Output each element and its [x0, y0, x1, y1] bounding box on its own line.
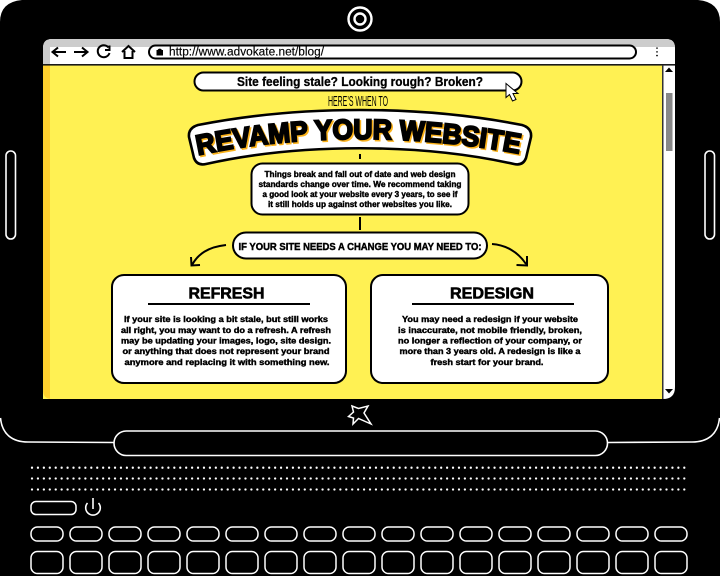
- keyboard: [31, 527, 687, 574]
- icon: home: [122, 46, 135, 58]
- white screen corners: [0, 0, 720, 22]
- scroll down arrow: [665, 389, 673, 394]
- icon: back arrow: [52, 48, 66, 56]
- laptop hinge with trackpad: [0, 418, 720, 456]
- icon: reload: [98, 45, 110, 57]
- scroll thumb: [666, 93, 672, 151]
- redesign rule: [412, 303, 574, 305]
- change banner: IF YOUR SITE NEEDS A CHANGE YOU MAY NEED TO:: [238, 241, 482, 253]
- panel: redesign: [371, 275, 608, 383]
- toolbar divider: [43, 64, 675, 66]
- intro text box: standards change over time. We recommend taking: [258, 180, 462, 189]
- title banner: [188, 108, 532, 166]
- panel: refresh: [112, 275, 346, 383]
- intro text box: it still holds up against other websites you like.: [268, 200, 452, 209]
- browser frame: [43, 39, 675, 399]
- scrollbar: [662, 65, 673, 399]
- intro text box: [252, 164, 468, 214]
- arrow: left: [191, 245, 226, 266]
- key row 1: [31, 527, 687, 541]
- icon: mouse cursor: [506, 84, 518, 101]
- icon: star logo: [348, 406, 371, 424]
- connector: [359, 154, 361, 159]
- connector: [359, 217, 361, 230]
- title text: REVAMP YOUR WEBSITE: [194, 118, 522, 156]
- refresh heading: REFRESH: [188, 286, 264, 302]
- key row 2: [31, 552, 687, 574]
- icon: forward arrow: [74, 48, 88, 56]
- browser top strip: [43, 39, 675, 65]
- refresh body: [121, 315, 331, 367]
- address bar: [149, 46, 636, 58]
- arrow: right: [492, 244, 527, 266]
- icon: menu dots: [656, 48, 658, 56]
- title banner shape: [189, 110, 531, 164]
- refresh body: or anything that does not represent your brand: [122, 347, 330, 356]
- change banner: [233, 232, 487, 258]
- icon: lock: [157, 49, 162, 55]
- refresh body: If your site is looking a bit stale, but still works: [124, 315, 328, 324]
- icon: webcam: [348, 8, 372, 30]
- redesign body: is inaccurate, not mobile friendly, broken,: [398, 326, 582, 335]
- title shadow: REVAMP YOUR WEBSITE: [200, 120, 524, 158]
- redesign body: [398, 315, 583, 367]
- text: HERE’S WHEN TO: [328, 93, 388, 110]
- spacebar key: [31, 502, 76, 514]
- refresh rule: [148, 303, 310, 305]
- speaker dots: [32, 468, 688, 490]
- redesign body: no longer a reflection of your company, or: [398, 336, 583, 346]
- redesign body: fresh start for your brand.: [430, 358, 544, 367]
- question banner: [194, 72, 522, 90]
- icon: power: [86, 498, 100, 515]
- scroll up arrow: [665, 68, 673, 72]
- refresh body: all right, you may want to do a refresh. A refresh: [121, 326, 331, 335]
- intro text box: Things break and fall out of date and web design: [264, 170, 456, 179]
- url: http://www.advokate.net/blog/: [169, 46, 325, 58]
- question banner: Site feeling stale? Looking rough? Broken?: [237, 74, 483, 89]
- page background: [43, 65, 662, 399]
- browser window: [43, 39, 675, 399]
- page left stripe: [43, 65, 52, 399]
- redesign heading: REDESIGN: [450, 286, 534, 302]
- intro text box: a good look at your website every 3 years, to see if: [262, 190, 458, 199]
- side button left: [6, 151, 16, 239]
- refresh body: anymore and replacing it with something new.: [124, 358, 330, 367]
- redesign body: more than 3 years old. A redesign is like a: [400, 347, 581, 356]
- refresh body: may be updating your images, logo, site design.: [121, 336, 331, 346]
- redesign body: You may need a redesign if your website: [402, 315, 578, 324]
- side button right: [705, 151, 714, 239]
